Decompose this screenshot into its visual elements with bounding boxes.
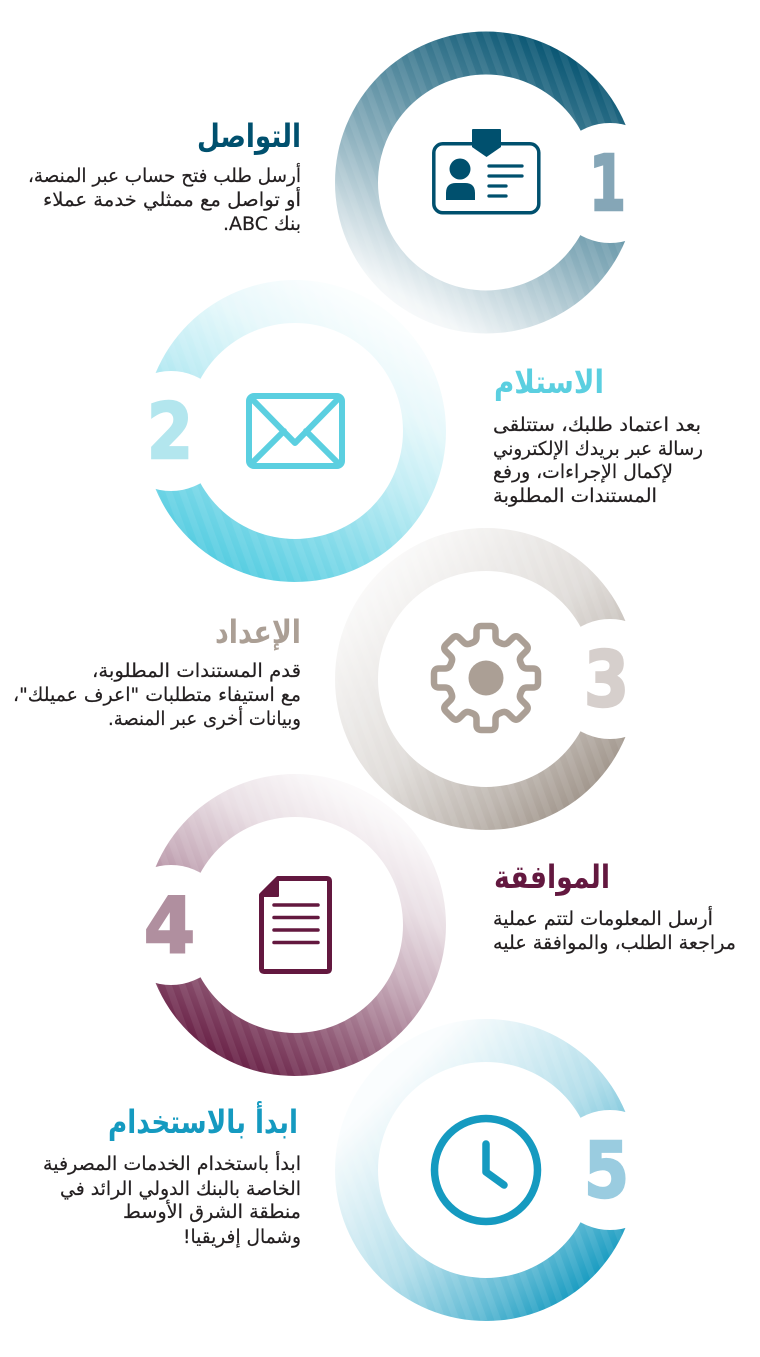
text block: step 5 <box>43 1101 301 1249</box>
text block: step 2: لإكمال الإجراءات، ورفع <box>493 461 673 483</box>
number 5: 5 <box>584 1127 629 1216</box>
text block: step 3: وبيانات أخرى عبر المنصة. <box>108 706 301 730</box>
heading: step 1: التواصل <box>197 117 301 155</box>
icon: document <box>261 878 330 972</box>
text block: step 2: رسالة عبر بريدك الإلكتروني <box>493 438 703 460</box>
panel: step 2 ring <box>111 280 446 582</box>
text block: step 5: منطقة الشرق الأوسط <box>123 1200 301 1223</box>
text block: step 2: المستندات المطلوبة <box>493 485 657 507</box>
text block: step 4: أرسل المعلومات لتتم عملية <box>493 906 713 930</box>
icon: gear <box>434 626 538 730</box>
number 1: 1 <box>589 140 626 229</box>
text block: step 5: الخاصة بالبنك الدولي الرائد في <box>60 1178 301 1200</box>
panel: step 1 ring <box>335 31 670 333</box>
number 4: 4 <box>144 882 195 971</box>
text block: step 4: مراجعة الطلب، والموافقة عليه <box>493 932 736 954</box>
text block: step 1: بنك ABC. <box>223 213 301 235</box>
text block: step 4 <box>493 858 736 954</box>
heading: step 3: الإعداد <box>215 613 301 651</box>
panel: step 5 ring <box>335 1019 670 1321</box>
text block: step 3: قدم المستندات المطلوبة، <box>92 660 301 682</box>
text block: step 2: بعد اعتماد طلبك، ستتلقى <box>493 414 701 436</box>
number 3: 3 <box>584 636 629 725</box>
panel: step 4 ring <box>111 774 446 1076</box>
number 2: 2 <box>147 388 193 477</box>
icon: envelope <box>249 396 342 466</box>
text block: step 1: أرسل طلب فتح حساب عبر المنصة، <box>28 163 301 187</box>
heading: step 2: الاستلام <box>494 363 604 401</box>
text block: step 3 <box>13 613 301 730</box>
heading: step 4: الموافقة <box>494 858 610 896</box>
text block: step 1: أو تواصل مع ممثلي خدمة عملاء <box>43 187 301 211</box>
text block: step 5: ابدأ باستخدام الخدمات المصرفية <box>43 1151 301 1175</box>
heading: step 5: ابدأ بالاستخدام <box>108 1101 298 1141</box>
text block: step 5: وشمال إفريقيا! <box>183 1226 301 1249</box>
text block: step 2 <box>493 363 703 507</box>
icon: id card <box>434 129 539 213</box>
panel: step 3 ring <box>335 528 670 830</box>
text block: step 3: مع استيفاء متطلبات "اعرف عميلك"، <box>13 684 301 706</box>
icon: clock <box>434 1118 538 1222</box>
text block: step 1 <box>28 117 301 235</box>
